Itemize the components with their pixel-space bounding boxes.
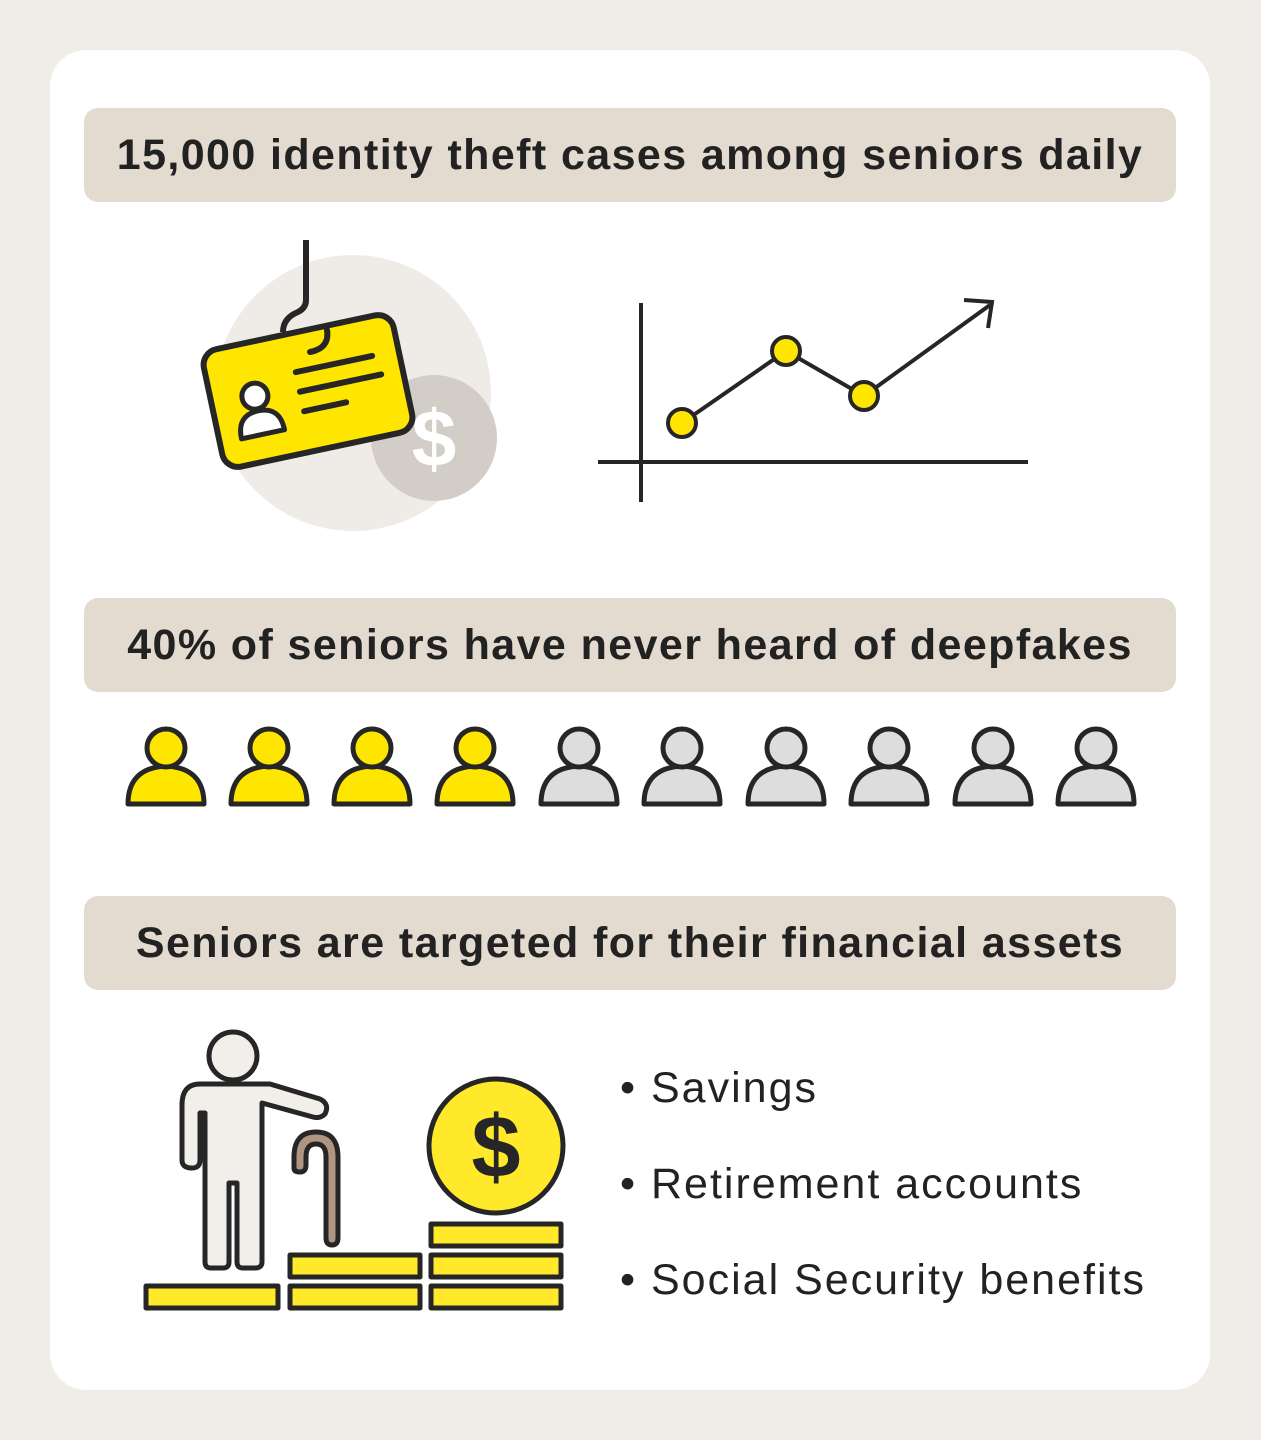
- list: assets: • Retirement accounts: [620, 1160, 1083, 1208]
- icon: phished ID card: $: [412, 394, 456, 483]
- list: assets: • Savings: [620, 1064, 818, 1112]
- pictogram: 4 of 10 people: [126, 726, 1136, 806]
- heading 2: [84, 598, 1176, 692]
- heading 3: Seniors are targeted for their financial assets: [136, 919, 1124, 967]
- list: assets: [620, 1064, 1146, 1304]
- heading 1: 15,000 identity theft cases among seniors daily: [117, 131, 1143, 179]
- icon: senior with coins: $: [472, 1097, 520, 1196]
- heading 1: [84, 108, 1176, 202]
- list: assets: • Social Security benefits: [620, 1256, 1146, 1304]
- heading 3: [84, 896, 1176, 990]
- heading 2: 40% of seniors have never heard of deepfakes: [127, 621, 1133, 669]
